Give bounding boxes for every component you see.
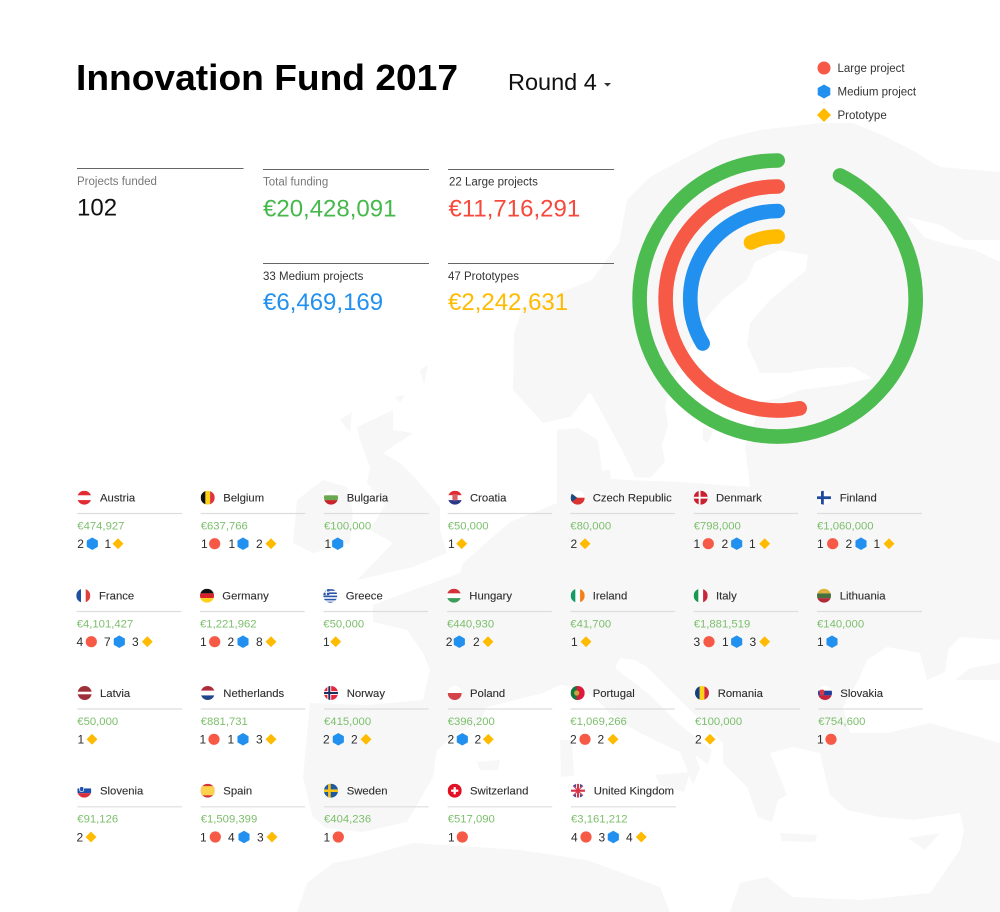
title: Innovation Fund 2017 — [76, 57, 458, 98]
arc: prototypes — [751, 236, 778, 242]
counts: Belgium: 1 — [201, 537, 208, 551]
country: Ireland — [570, 589, 675, 649]
counts: Austria: 2 — [77, 537, 84, 551]
country: Lithuania: Lithuania — [840, 591, 886, 603]
stat: total funding: Total funding — [263, 176, 328, 188]
country: Croatia: Croatia — [470, 493, 507, 505]
country: Switzerland: Switzerland — [470, 786, 528, 798]
country: Netherlands — [200, 686, 305, 747]
counts: Belgium: 2 — [256, 537, 263, 551]
counts: Netherlands: 1 — [200, 733, 206, 747]
counts: Italy — [694, 635, 770, 649]
country: United Kingdom: €3,161,212 — [571, 814, 628, 826]
country: Switzerland — [448, 784, 552, 844]
flag: Norway — [324, 686, 338, 700]
country: Belgium: Belgium — [223, 493, 264, 505]
counts: Poland: 2 — [474, 733, 482, 747]
country: Czech Republic — [570, 491, 675, 551]
counts: Spain: 1 — [200, 830, 207, 844]
counts: France: 4 — [76, 635, 84, 649]
country: Lithuania — [817, 589, 922, 649]
country: Poland — [448, 686, 552, 747]
country: Portugal: Portugal — [593, 688, 635, 700]
counts: Romania: 2 — [695, 733, 702, 747]
counts: Finland: 1 — [817, 537, 824, 551]
stat: prototypes: 47 Prototypes — [448, 271, 519, 283]
counts: France: 7 — [104, 635, 111, 649]
counts: United Kingdom — [571, 830, 646, 844]
counts: Portugal: 2 — [570, 733, 577, 747]
country: Hungary: €440,930 — [447, 619, 494, 631]
counts: Austria — [77, 537, 123, 551]
counts: Netherlands — [200, 733, 276, 747]
flag: Spain — [201, 784, 215, 798]
country: Italy: Italy — [716, 591, 737, 603]
counts: Finland — [817, 537, 894, 551]
country: Lithuania: €140,000 — [817, 619, 864, 631]
country: Greece — [323, 589, 428, 649]
flag: Switzerland — [448, 784, 462, 798]
legend: Prototype — [838, 110, 887, 122]
counts: Belgium: 1 — [228, 537, 236, 551]
country: Greece: €50,000 — [323, 619, 364, 631]
country: France: France — [99, 591, 134, 603]
country: Croatia — [448, 491, 552, 551]
country: United Kingdom — [571, 784, 676, 844]
country: Netherlands: Netherlands — [223, 688, 285, 700]
country: Denmark: Denmark — [716, 493, 762, 505]
country: Slovakia — [817, 686, 923, 747]
counts: Switzerland: 1 — [448, 830, 455, 844]
country: Croatia: €50,000 — [448, 521, 489, 533]
country: Greece: Greece — [346, 591, 383, 603]
flag: Bulgaria — [324, 495, 338, 505]
country: Germany: Germany — [222, 591, 269, 603]
counts: France: 3 — [132, 635, 139, 649]
stat: prototypes: €2,242,631 — [448, 289, 568, 316]
country: Austria: €474,927 — [77, 521, 124, 533]
country: Belgium: €637,766 — [201, 521, 248, 533]
flag: Latvia — [78, 686, 92, 700]
flag: Belgium — [201, 491, 215, 505]
flag: Denmark — [694, 491, 708, 505]
country: Netherlands: €881,731 — [201, 716, 248, 728]
country: Latvia: €50,000 — [77, 716, 118, 728]
stat: medium projects — [263, 264, 429, 316]
counts: Portugal: 2 — [598, 733, 604, 747]
stat: projects funded: Projects funded — [77, 176, 157, 188]
country: Slovakia: €754,600 — [818, 716, 865, 728]
country: Finland: €1,060,000 — [817, 521, 874, 533]
country: Bulgaria — [324, 491, 429, 551]
country: France — [76, 589, 181, 649]
counts: Netherlands: 1 — [228, 733, 234, 747]
counts: Finland: 2 — [846, 537, 852, 551]
flag: Lithuania — [817, 589, 831, 603]
legend: Medium project — [838, 86, 917, 98]
stat: projects funded: 102 — [77, 195, 117, 222]
counts: Spain: 3 — [257, 830, 264, 844]
legend — [817, 62, 917, 122]
country: Hungary: Hungary — [469, 591, 512, 603]
counts: Hungary — [446, 635, 493, 649]
country: Finland — [817, 491, 922, 551]
flag: Hungary — [447, 589, 461, 603]
flag: Austria — [77, 491, 91, 505]
country: Bulgaria: Bulgaria — [347, 493, 389, 505]
counts: United Kingdom: 3 — [598, 830, 606, 844]
counts: Spain — [200, 830, 277, 844]
flag: Ireland — [571, 589, 585, 603]
counts: Denmark — [694, 537, 770, 551]
country: Romania: €100,000 — [695, 716, 742, 728]
country: Sweden: €404,236 — [324, 814, 371, 826]
country: Slovenia: Slovenia — [100, 786, 144, 798]
country: France: €4,101,427 — [77, 619, 133, 631]
country: Spain — [200, 784, 305, 844]
flag: Poland — [448, 693, 462, 700]
counts: Sweden: 1 — [324, 830, 330, 844]
flag: Slovenia — [77, 784, 91, 798]
counts: Slovenia: 2 — [76, 830, 84, 844]
stat: large projects: 22 Large projects — [449, 176, 538, 188]
flag: Greece — [323, 589, 337, 603]
stat: large projects — [448, 170, 614, 222]
counts: Norway: 2 — [351, 733, 358, 747]
flag: Italy — [694, 589, 708, 603]
counts: Norway — [323, 733, 371, 747]
counts: Belgium — [201, 537, 276, 551]
counts: Germany: 8 — [256, 635, 263, 649]
country: Denmark — [694, 491, 798, 551]
country: Czech Republic: Czech Republic — [593, 493, 672, 505]
flag: Slovakia — [818, 686, 832, 700]
flag: Czech Republic — [570, 494, 585, 505]
country: Slovenia: €91,126 — [77, 814, 118, 826]
round selector: Round 4 — [508, 69, 597, 95]
flag: Croatia — [448, 491, 462, 505]
counts: Italy: 3 — [694, 635, 700, 649]
counts: Ireland: 1 — [571, 635, 578, 649]
country: Sweden — [324, 784, 429, 844]
country: Czech Republic: €80,000 — [570, 521, 611, 533]
counts: Poland: 2 — [448, 733, 454, 747]
counts: Croatia: 1 — [448, 537, 455, 551]
counts: Netherlands: 3 — [256, 733, 263, 747]
counts: Austria: 1 — [104, 537, 112, 551]
counts: United Kingdom: 4 — [626, 830, 633, 844]
country: Norway: €415,000 — [324, 716, 371, 728]
arc: medium projects — [690, 211, 778, 344]
stat: total funding — [263, 170, 429, 222]
flag: Finland — [817, 491, 831, 505]
flag: Netherlands — [201, 686, 215, 700]
stat: total funding: €20,428,091 — [263, 196, 396, 222]
stat: large projects: €11,716,291 — [448, 196, 580, 222]
country: Belgium — [201, 491, 305, 551]
country: Portugal — [570, 686, 675, 747]
country: Latvia: Latvia — [100, 688, 131, 700]
country: Germany — [200, 589, 305, 649]
country: Austria — [77, 491, 182, 551]
country: Austria: Austria — [100, 493, 136, 505]
country: Spain: €1,509,399 — [201, 814, 257, 826]
counts: Spain: 4 — [228, 830, 235, 844]
flag: France — [76, 589, 90, 603]
counts: Lithuania: 1 — [817, 635, 824, 649]
stat: prototypes — [448, 264, 614, 316]
counts: Latvia: 1 — [78, 733, 84, 747]
counts: Hungary: 2 — [473, 635, 480, 649]
counts: Greece: 1 — [323, 635, 330, 649]
country: Poland: Poland — [470, 688, 505, 700]
country: Spain: Spain — [223, 786, 252, 798]
counts: United Kingdom: 4 — [571, 830, 578, 844]
country: United Kingdom: United Kingdom — [594, 786, 674, 798]
flag: Romania — [695, 686, 709, 700]
counts: Italy: 1 — [722, 635, 729, 649]
country: Germany: €1,221,962 — [200, 619, 257, 631]
flag: Germany — [200, 589, 214, 603]
counts: Germany — [200, 635, 276, 649]
country: Slovenia — [76, 784, 182, 844]
stat: projects funded — [77, 168, 244, 222]
counts: Czech Republic: 2 — [570, 537, 578, 551]
country: Latvia — [77, 686, 182, 747]
counts: Finland: 1 — [874, 537, 880, 551]
flag: United Kingdom — [571, 784, 585, 798]
country: Bulgaria: €100,000 — [324, 521, 371, 533]
country: Denmark: €798,000 — [694, 521, 741, 533]
counts: Norway: 2 — [323, 733, 330, 747]
counts: France — [76, 635, 152, 649]
country: Ireland: €41,700 — [570, 619, 611, 631]
country: Poland: €396,200 — [448, 716, 495, 728]
counts: Italy: 3 — [750, 635, 756, 649]
country: Slovakia: Slovakia — [840, 688, 884, 700]
country: Finland: Finland — [840, 493, 877, 505]
counts: Poland — [448, 733, 493, 747]
counts: Bulgaria: 1 — [324, 537, 332, 551]
stat: medium projects: €6,469,169 — [263, 289, 383, 316]
counts: Germany: 1 — [200, 635, 207, 649]
country: Ireland: Ireland — [593, 591, 627, 603]
background map of Europe — [293, 123, 1000, 912]
flag: Sweden — [324, 784, 338, 798]
counts: Denmark: 2 — [722, 537, 728, 551]
country: Italy: €1,881,519 — [694, 619, 750, 631]
country: Romania: Romania — [718, 688, 764, 700]
counts: Portugal — [570, 733, 618, 747]
flag: Portugal — [571, 686, 585, 700]
arc: total funding — [640, 160, 916, 436]
country: Sweden: Sweden — [347, 786, 388, 798]
country: Switzerland: €517,090 — [448, 814, 495, 826]
country: Italy — [694, 589, 798, 649]
counts: Hungary: 2 — [446, 635, 453, 649]
country: Romania — [695, 686, 800, 747]
radial bar chart — [640, 160, 916, 436]
arc: large projects — [666, 186, 800, 410]
counts: Denmark: 1 — [694, 537, 700, 551]
country: Hungary — [446, 589, 552, 649]
counts: Germany: 2 — [228, 635, 234, 649]
counts: Denmark: 1 — [749, 537, 756, 551]
country: Portugal: €1,069,266 — [570, 716, 627, 728]
country: Norway — [323, 686, 429, 747]
legend: Large project — [838, 63, 905, 75]
counts: Slovakia: 1 — [817, 733, 824, 747]
stat: medium projects: 33 Medium projects — [263, 271, 364, 283]
country: Norway: Norway — [347, 688, 385, 700]
